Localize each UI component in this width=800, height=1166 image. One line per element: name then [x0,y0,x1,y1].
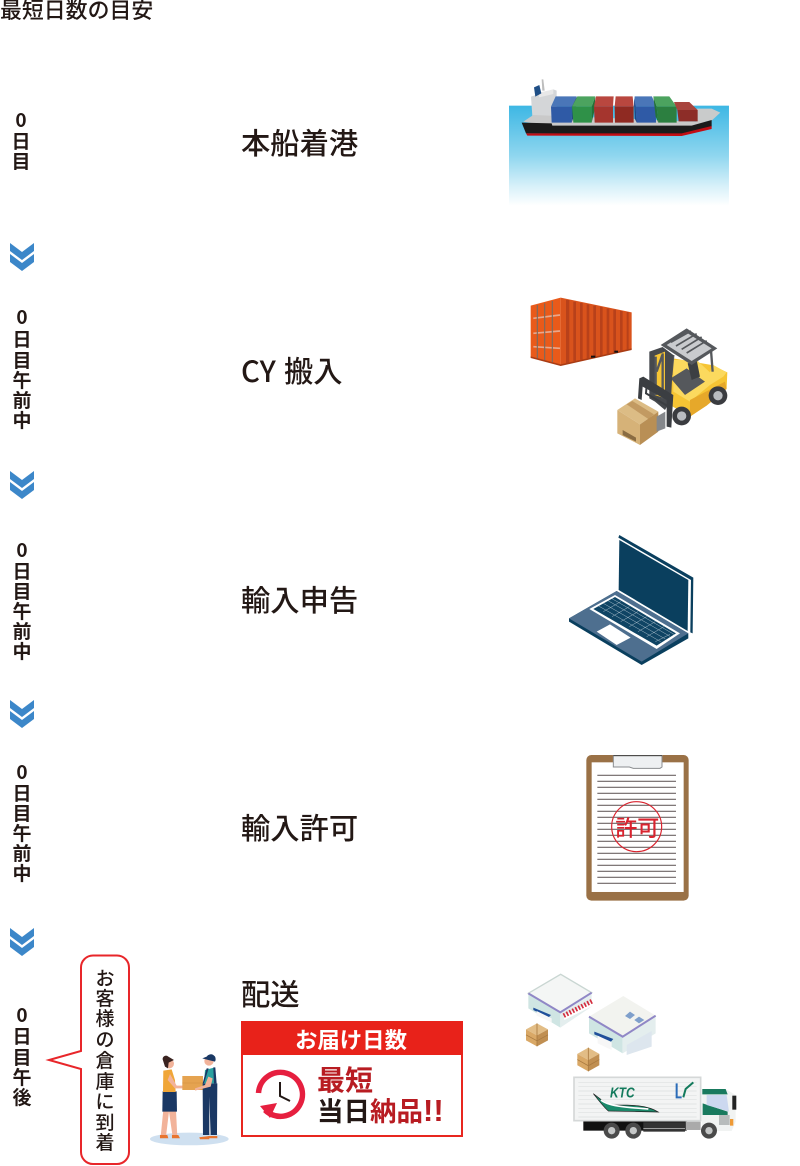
day label: step 4: 日 [12,779,32,806]
day label: step 5: 日 [12,1022,32,1049]
day label: step 2: 午 [12,366,32,393]
icon: shipping container and forklift [531,298,727,445]
icon: clock with return arrow [258,1072,302,1118]
heading: step 2: CY [241,349,276,391]
callout: arrival at customer warehouse: お [95,964,115,991]
arrow: down chevrons 3 [10,700,34,728]
heading: step 3: 輸入申告 [241,578,358,620]
day label: step 3: 日 [12,557,32,584]
panel header [241,1021,463,1055]
heading: step 2: 搬入 [284,349,343,391]
day label: step 2: 中 [12,406,32,433]
callout: arrival at customer warehouse: 客 [95,984,115,1011]
day label: step 2: 日 [12,325,32,352]
arrow: down chevrons 1 [10,243,34,271]
callout: arrival at customer warehouse: の [95,1025,115,1052]
icon: clipboard with permit stamp [586,755,689,901]
day label: step 2: 前 [12,386,32,413]
panel: delivery days [241,1021,463,1136]
callout: arrival at customer warehouse: に [95,1087,115,1114]
callout: arrival at customer warehouse: 庫 [95,1067,115,1094]
arrow: down chevrons 4 [10,928,34,956]
day label: step 1: 目 [11,147,31,174]
day label: step 3: 目 [12,577,32,604]
day label: step 1: 日 [11,127,31,154]
day label: step 5: 後 [12,1083,32,1110]
heading: step 1: 本船着港 [241,121,358,163]
callout: arrival at customer warehouse: 到 [95,1108,115,1135]
day label: step 5: 午 [12,1063,32,1090]
day label: step 3: 0 [16,536,28,563]
day label: step 2: 目 [12,346,32,373]
day label: step 4: 中 [12,859,32,886]
text: shortest: 最短 [317,1065,373,1096]
day label: step 4: 目 [12,799,32,826]
day label: step 3: 前 [12,617,32,644]
icon: package handover people [150,1054,229,1145]
text: same-day delivery: 当日納品!! [317,1093,444,1128]
day label: step 2: 0 [16,303,28,330]
day label: step 4: 0 [16,758,28,785]
callout: arrival at customer warehouse: 倉 [95,1046,115,1073]
panel header text: お届け日数 [295,1028,407,1053]
icon: clipboard with permit stamp: 許可 [615,816,659,841]
day label: step 1: 0 [15,106,27,133]
day label: step 5: 目 [12,1043,32,1070]
heading: step 5: 配送 [241,972,300,1014]
icon: warehouses, cartons and KTC truck: KTC [610,1085,635,1101]
heading: step 4: 輸入許可 [241,806,358,848]
callout: arrival at customer warehouse: 着 [95,1128,115,1155]
icon: laptop [569,535,693,665]
icon: warehouses, cartons and KTC truck [526,974,736,1139]
day label: step 3: 午 [12,597,32,624]
callout: arrival at customer warehouse: 様 [95,1004,115,1031]
day label: step 4: 午 [12,819,32,846]
callout: arrival at customer warehouse [49,956,129,1164]
icon: container ship at sea [509,79,729,206]
day label: step 3: 中 [12,637,32,664]
arrow: down chevrons 2 [10,471,34,499]
day label: step 5: 0 [16,1001,28,1028]
day label: step 4: 前 [12,839,32,866]
